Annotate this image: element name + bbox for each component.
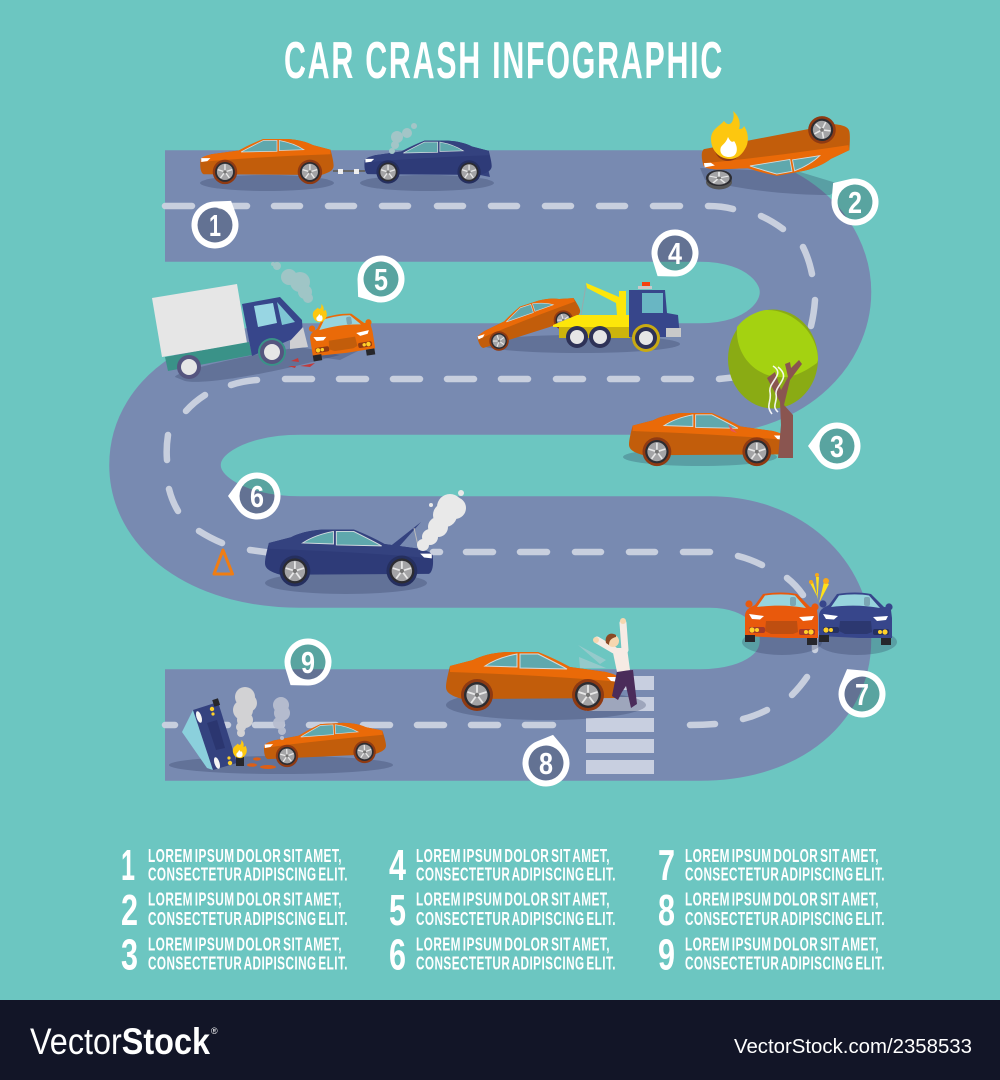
marker 2 <box>818 165 888 235</box>
legend column 3: LOREM IPSUM DOLOR SIT AMET, <box>685 845 879 866</box>
marker 7 <box>827 657 894 726</box>
scene 8: car hitting pedestrian <box>446 645 646 720</box>
footer bar: ® <box>211 1026 218 1036</box>
legend column 2: 5 <box>389 886 406 935</box>
marker 3 <box>808 422 861 470</box>
zebra crossing <box>586 676 654 774</box>
scene 1: towed car <box>200 139 334 191</box>
legend column 1: 1 <box>121 841 135 890</box>
scene 5: truck collision <box>152 262 377 382</box>
legend column 2: LOREM IPSUM DOLOR SIT AMET, <box>416 934 610 954</box>
legend column 2: LOREM IPSUM DOLOR SIT AMET, <box>416 845 610 866</box>
marker 8: 8 <box>539 746 553 781</box>
marker 9 <box>272 629 341 699</box>
marker 1: 1 <box>209 208 221 243</box>
scene 6: broken-down car with raised hood <box>265 490 466 594</box>
scene 7: head-on collision <box>742 573 897 655</box>
marker 5 <box>344 246 414 315</box>
marker 1 <box>182 188 251 258</box>
legend column 2: CONSECTETUR ADIPISCING ELIT. <box>416 864 616 884</box>
legend column 2: 6 <box>389 930 406 980</box>
legend column 1 <box>121 841 348 980</box>
pedestrian <box>593 618 637 708</box>
scene 3: tree and crashed car <box>623 310 818 466</box>
road centre dashes <box>165 206 815 725</box>
marker 2: 2 <box>848 185 862 220</box>
tow rope <box>333 169 365 174</box>
footer bar: VectorStock <box>30 1021 210 1062</box>
legend column 1: CONSECTETUR ADIPISCING ELIT. <box>148 952 348 974</box>
footer bar <box>0 1000 1000 1080</box>
marker 9: 9 <box>301 645 315 680</box>
legend column 3: LOREM IPSUM DOLOR SIT AMET, <box>685 888 879 910</box>
marker 5: 5 <box>374 262 388 297</box>
legend column 2: CONSECTETUR ADIPISCING ELIT. <box>416 952 616 974</box>
legend column 1: CONSECTETUR ADIPISCING ELIT. <box>148 908 348 929</box>
legend column 3: 7 <box>658 841 675 890</box>
legend column 1: 3 <box>121 930 138 980</box>
legend column 3: CONSECTETUR ADIPISCING ELIT. <box>685 952 885 974</box>
marker 6: 6 <box>250 479 264 514</box>
legend column 2: CONSECTETUR ADIPISCING ELIT. <box>416 908 616 929</box>
legend column 3: 8 <box>658 886 675 935</box>
legend column 3: LOREM IPSUM DOLOR SIT AMET, <box>685 934 879 954</box>
legend column 1: 2 <box>121 886 138 935</box>
legend column 1: CONSECTETUR ADIPISCING ELIT. <box>148 864 348 884</box>
legend column 3: CONSECTETUR ADIPISCING ELIT. <box>685 864 885 884</box>
scene 2: overturned burning car <box>698 111 855 195</box>
legend column 2: 4 <box>389 841 406 890</box>
legend column 3: CONSECTETUR ADIPISCING ELIT. <box>685 908 885 929</box>
legend column 1: LOREM IPSUM DOLOR SIT AMET, <box>148 845 342 866</box>
marker 7: 7 <box>855 677 869 712</box>
marker 4: 4 <box>668 236 683 271</box>
scene 9: rollover collision <box>169 687 393 774</box>
legend column 2 <box>389 841 616 980</box>
scene 4: car on tow truck <box>472 289 680 356</box>
legend column 1: LOREM IPSUM DOLOR SIT AMET, <box>148 888 342 910</box>
warning triangle <box>214 550 232 574</box>
scene 1: broken blue car <box>360 123 494 191</box>
marker 3: 3 <box>830 429 844 464</box>
legend column 2: LOREM IPSUM DOLOR SIT AMET, <box>416 888 610 910</box>
marker 8 <box>518 729 576 792</box>
legend column 3 <box>658 841 885 980</box>
marker 4 <box>639 220 708 290</box>
legend column 1: LOREM IPSUM DOLOR SIT AMET, <box>148 934 342 954</box>
marker 6 <box>228 472 281 520</box>
winding road <box>165 206 816 725</box>
legend column 3: 9 <box>658 930 675 980</box>
tow truck <box>553 282 681 352</box>
footer bar: VectorStock.com/2358533 <box>734 1035 972 1058</box>
